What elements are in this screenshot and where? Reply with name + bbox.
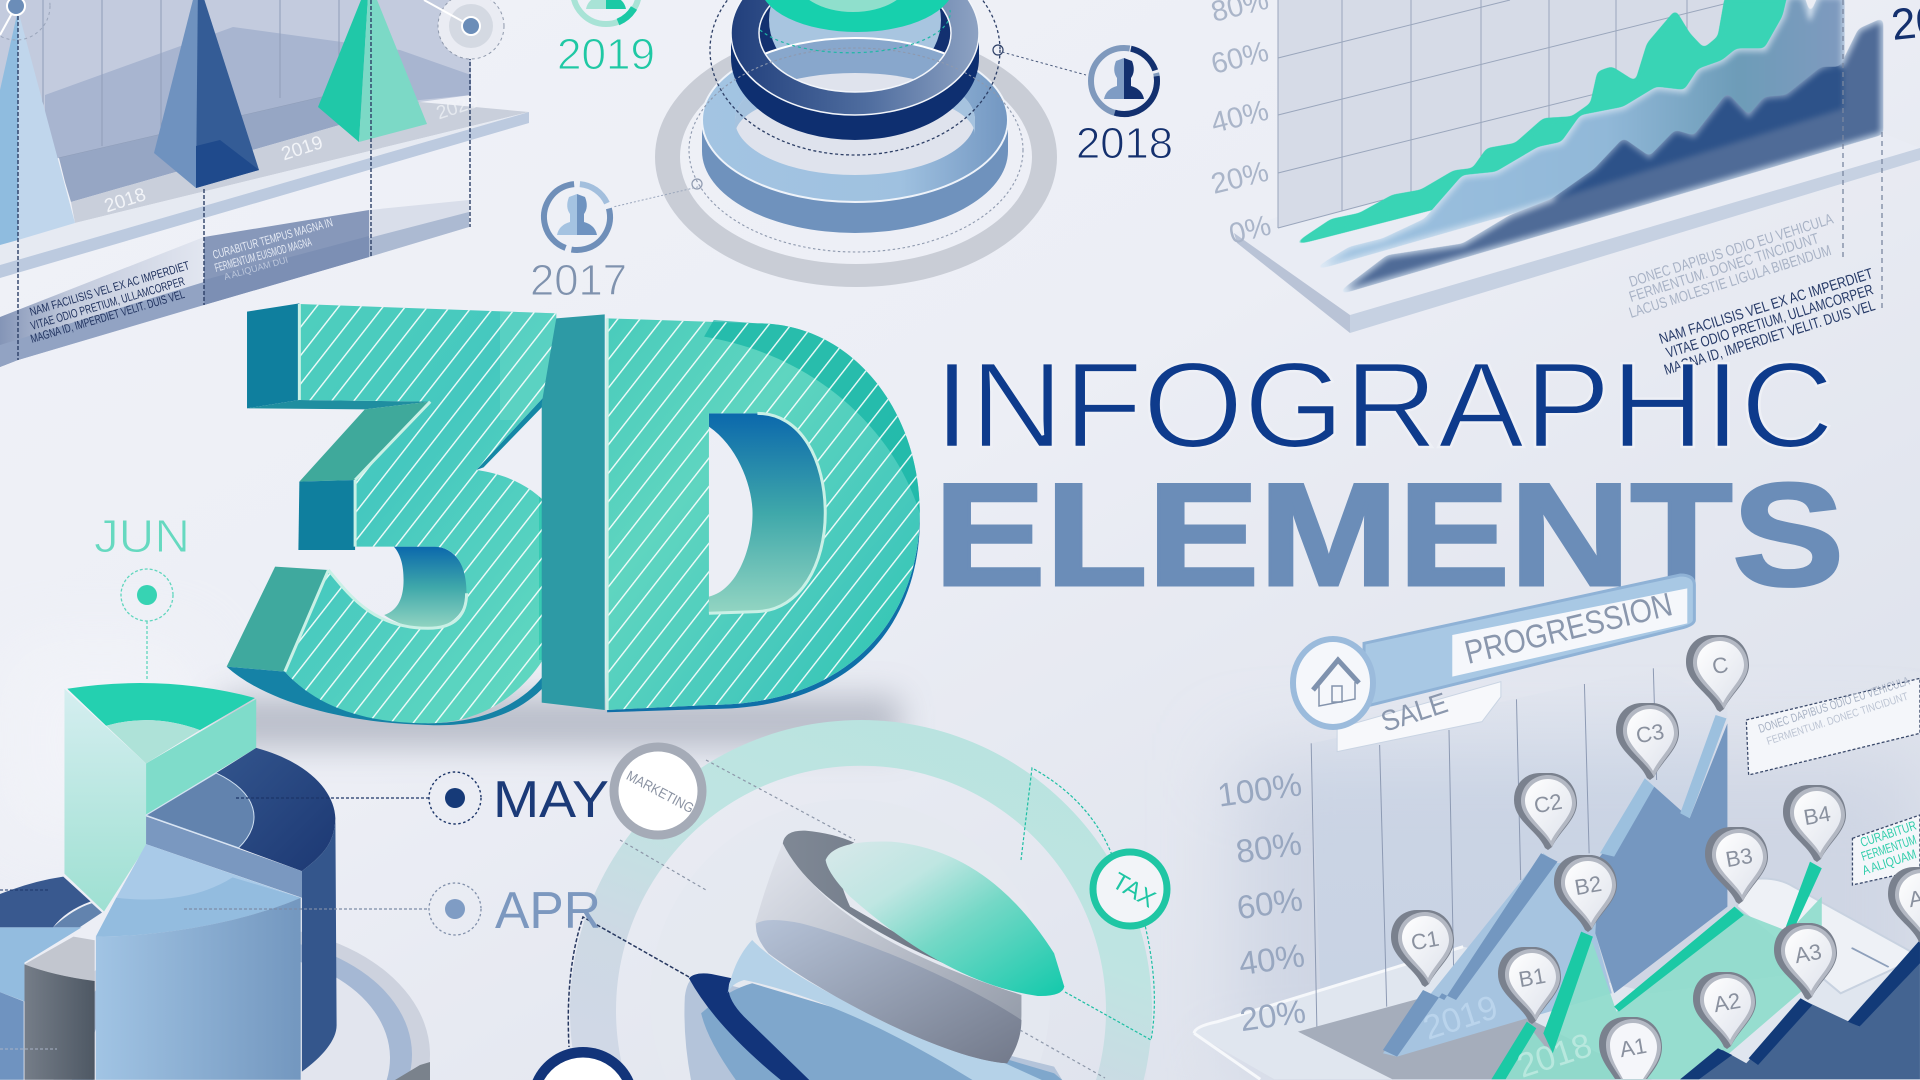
node: marketing bbox=[614, 747, 702, 835]
label: MAY: MAY bbox=[493, 771, 609, 829]
pin: C bbox=[1686, 635, 1749, 712]
percent axis labels: 40% bbox=[1236, 936, 1307, 982]
left dashes bbox=[0, 890, 57, 1049]
sphere slices bbox=[684, 831, 1064, 1080]
caption: curabitur bbox=[211, 215, 334, 282]
node: tax: TAX bbox=[1108, 868, 1160, 913]
banner: sale bbox=[1337, 682, 1501, 752]
pin: B4: B4 bbox=[1802, 801, 1833, 830]
dashed drop lines bbox=[1843, 0, 1882, 310]
pin: B3: B3 bbox=[1724, 843, 1755, 872]
label: 2017: 2017 bbox=[530, 256, 627, 305]
inner pale arc bbox=[650, 799, 1050, 1080]
pin: C1: C1 bbox=[1409, 926, 1441, 955]
caption: donec: DONEC DAPIBUS ODIO EU VEHICULA bbox=[1627, 211, 1835, 291]
pin: A2 bbox=[1693, 972, 1756, 1049]
area: navy series bbox=[1340, 20, 1882, 293]
node top right bbox=[424, 0, 504, 59]
navy segment bbox=[146, 748, 337, 1072]
banner: sale: SALE bbox=[1377, 687, 1452, 739]
caption: donec: LACUS MOLESTIE LIGULA BIBENDUM bbox=[1627, 242, 1833, 322]
back wall bbox=[0, 0, 471, 176]
pyramid: navy bbox=[154, 0, 259, 188]
percent axis labels: 20% bbox=[1208, 156, 1272, 201]
node: tax bbox=[1093, 852, 1167, 926]
icon: 2019 person bbox=[573, 0, 639, 24]
pin: C: C bbox=[1710, 652, 1730, 679]
title: INFOGRAPHIC: INFOGRAPHIC bbox=[934, 337, 1834, 473]
percent axis labels: 60% bbox=[1208, 36, 1272, 81]
panel: radial sphere chart bbox=[533, 720, 1167, 1080]
pin: A2: A2 bbox=[1712, 988, 1743, 1017]
marker: APR bbox=[184, 883, 481, 935]
pin: A3: A3 bbox=[1793, 939, 1824, 968]
dashed guides bbox=[568, 760, 1154, 1078]
banner: progression bbox=[1364, 575, 1694, 707]
pin: B1 bbox=[1498, 947, 1561, 1024]
digit 3 extrusion bbox=[227, 303, 568, 725]
dashed note: donec bbox=[1746, 674, 1920, 775]
phone base bbox=[1194, 878, 1920, 1079]
pin: C3 bbox=[1616, 703, 1679, 780]
left navy segment bbox=[0, 877, 102, 1080]
year labels: 2020 bbox=[434, 91, 481, 124]
caption: nam facilisis bbox=[28, 258, 191, 346]
caption: curabitur: CURABITUR TEMPUS MAGNA IN bbox=[211, 215, 334, 262]
year labels: 2018 bbox=[102, 184, 149, 217]
vertical grid lines bbox=[1311, 668, 1657, 1027]
letter D stem bbox=[542, 314, 605, 710]
percent axis labels bbox=[1215, 765, 1308, 1038]
chart wall bbox=[1311, 668, 1727, 1027]
icon: house bbox=[1293, 639, 1373, 727]
large blue ring bbox=[702, 38, 1008, 233]
pin: B2: B2 bbox=[1573, 871, 1604, 900]
letter D depth bbox=[607, 413, 920, 712]
label: APR: APR bbox=[495, 882, 601, 940]
digit 3 front face bbox=[284, 304, 556, 724]
icon: 2018 person bbox=[1085, 42, 1163, 120]
title: ELEMENTS: ELEMENTS bbox=[934, 453, 1844, 616]
navy ring bbox=[731, 0, 979, 140]
panel: stacked rings bbox=[613, 0, 1086, 287]
base ring bbox=[50, 925, 430, 1080]
series A area bbox=[1680, 940, 1920, 1079]
chart year labels: 2019 bbox=[1419, 988, 1502, 1048]
caption: curabitur: A ALIQUAM DUI bbox=[223, 255, 289, 282]
label: JUN: JUN bbox=[94, 510, 190, 562]
icon: 2017 person bbox=[537, 177, 617, 257]
percent axis labels: 40% bbox=[1208, 95, 1272, 140]
percent axis labels: 20% bbox=[1237, 992, 1308, 1038]
series B area bbox=[1491, 862, 1822, 1079]
pin: B3 bbox=[1705, 827, 1768, 904]
dashed connector lines bbox=[18, 0, 470, 360]
letter D front face bbox=[606, 318, 920, 710]
grey segment bbox=[24, 937, 95, 1080]
pin: A4 bbox=[1888, 867, 1920, 944]
pin: A3 bbox=[1774, 923, 1837, 1000]
light blue segment bbox=[96, 844, 301, 1080]
node top left bbox=[0, 0, 50, 40]
node: bottom circle bbox=[533, 1047, 633, 1080]
outer arc ring bbox=[570, 720, 1152, 1080]
panel: pin line chart bbox=[1194, 575, 1920, 1080]
marker: JUN bbox=[121, 569, 173, 681]
chart wall and grid bbox=[1278, 0, 1780, 228]
percent axis labels bbox=[1208, 0, 1274, 251]
chart year labels bbox=[1419, 988, 1596, 1080]
caption: nam facilisis right: NAM FACILISIS VEL EX AC IMPERDIET bbox=[1657, 265, 1875, 348]
banner: progression: PROGRESSION bbox=[1461, 585, 1676, 671]
dashed note: curabitur bbox=[1852, 815, 1920, 885]
pyramid: green bbox=[318, 0, 427, 142]
pin: A1: A1 bbox=[1618, 1033, 1649, 1062]
caption: nam facilisis: VITAE ODIO PRETIUM, ULLAMCORPER bbox=[29, 274, 186, 333]
phone slot bbox=[1852, 948, 1888, 967]
caption: curabitur: FERMENTUM EUISMOD MAGNA bbox=[213, 235, 313, 275]
node: marketing: MARKETING bbox=[624, 767, 697, 816]
green top disc bbox=[760, 0, 954, 32]
pin: C1 bbox=[1391, 910, 1454, 987]
platform slab bbox=[1234, 60, 1920, 333]
title: 3D letters bbox=[227, 300, 940, 740]
pin: C3: C3 bbox=[1634, 719, 1666, 748]
series C area bbox=[1383, 715, 1727, 1057]
caption: donec: FERMENTUM. DONEC TINCIDUNT bbox=[1627, 230, 1821, 306]
pin: B4 bbox=[1783, 785, 1846, 862]
pin: B1: B1 bbox=[1517, 963, 1548, 992]
green segment bbox=[64, 683, 256, 911]
percent axis labels: 80% bbox=[1233, 824, 1304, 870]
percent axis labels: 60% bbox=[1234, 880, 1305, 926]
panel: area chart top right bbox=[1208, 0, 1920, 379]
area: green series bbox=[1291, 0, 1789, 246]
pin: C2: C2 bbox=[1532, 789, 1564, 818]
year labels bbox=[102, 91, 481, 217]
label: 2019: 2019 bbox=[557, 30, 655, 79]
hanging caption panels bbox=[0, 200, 469, 367]
year labels: 2019 bbox=[279, 132, 326, 165]
dashed orbit rings bbox=[613, 0, 1086, 252]
pyramid: light blue bbox=[0, 10, 75, 245]
label: 2018: 2018 bbox=[1076, 119, 1173, 168]
marker: MAY bbox=[236, 772, 481, 824]
panel: pyramid chart top left bbox=[0, 0, 529, 367]
pin: A1 bbox=[1599, 1017, 1662, 1079]
platform bbox=[0, 95, 529, 278]
caption: nam facilisis: NAM FACILISIS VEL EX AC IMPERDIET bbox=[28, 258, 191, 319]
pin: B2 bbox=[1554, 855, 1617, 932]
percent axis labels: 100% bbox=[1215, 765, 1304, 814]
percent axis labels: 0% bbox=[1226, 210, 1274, 251]
caption: nam facilisis: MAGNA ID, IMPERDIET VELIT. DUIS VEL bbox=[29, 287, 186, 346]
area: mid blue series bbox=[1317, 0, 1843, 268]
pin: C2 bbox=[1514, 773, 1577, 850]
panel: segmented cylinder chart bbox=[0, 510, 609, 1080]
outer grey ring bbox=[655, 27, 1057, 287]
